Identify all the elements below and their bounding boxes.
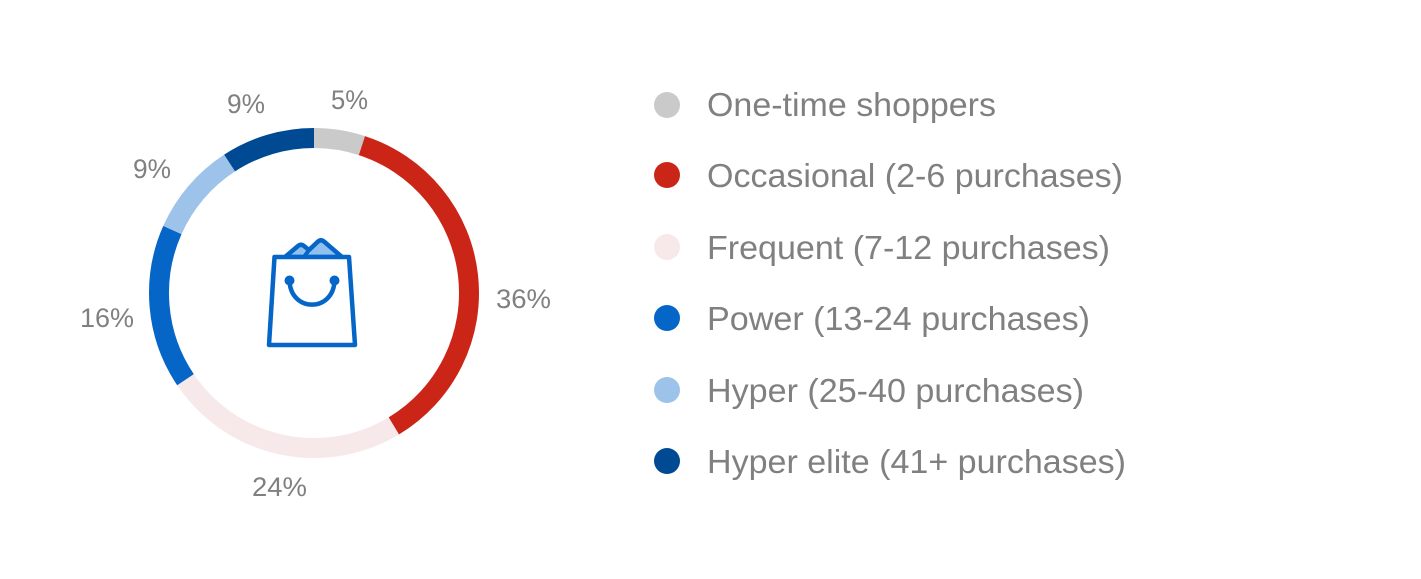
legend item: frequent: Frequent (7-12 purchases)	[707, 229, 1110, 266]
bag body	[269, 257, 355, 345]
icon: shopping bag	[269, 240, 355, 345]
label: 24%: 24%	[252, 472, 307, 502]
tissue fold	[304, 250, 309, 257]
handle right rivet	[330, 276, 340, 286]
label: 9% left: 9%	[133, 154, 171, 184]
legend item: occasional: Occasional (2-6 purchases)	[707, 157, 1123, 194]
donut chart	[159, 138, 469, 448]
legend item: hyper: Hyper (25-40 purchases)	[707, 372, 1084, 409]
segment: hyper 9%	[172, 163, 230, 230]
legend item: hyper elite: Hyper elite (41+ purchases)	[707, 443, 1126, 480]
segment: occasional 36%	[362, 146, 469, 426]
label: 36%: 36%	[496, 284, 551, 314]
segment: one-time shoppers 5%	[314, 138, 362, 146]
segment: power 16%	[159, 230, 186, 380]
segment: frequent 24%	[186, 380, 394, 448]
handle left rivet	[284, 276, 294, 286]
label: 16%: 16%	[80, 303, 134, 333]
bag handle	[290, 281, 334, 305]
legend	[654, 86, 1126, 480]
legend item: power: Power (13-24 purchases)	[707, 300, 1090, 337]
percentage labels	[80, 85, 551, 502]
legend item: one-time shoppers: One-time shoppers	[707, 86, 996, 123]
segment: hyper elite 9%	[230, 138, 314, 163]
label: 9% top: 9%	[227, 89, 265, 119]
bag tissue paper	[285, 240, 342, 257]
label: 5%: 5%	[331, 85, 368, 115]
